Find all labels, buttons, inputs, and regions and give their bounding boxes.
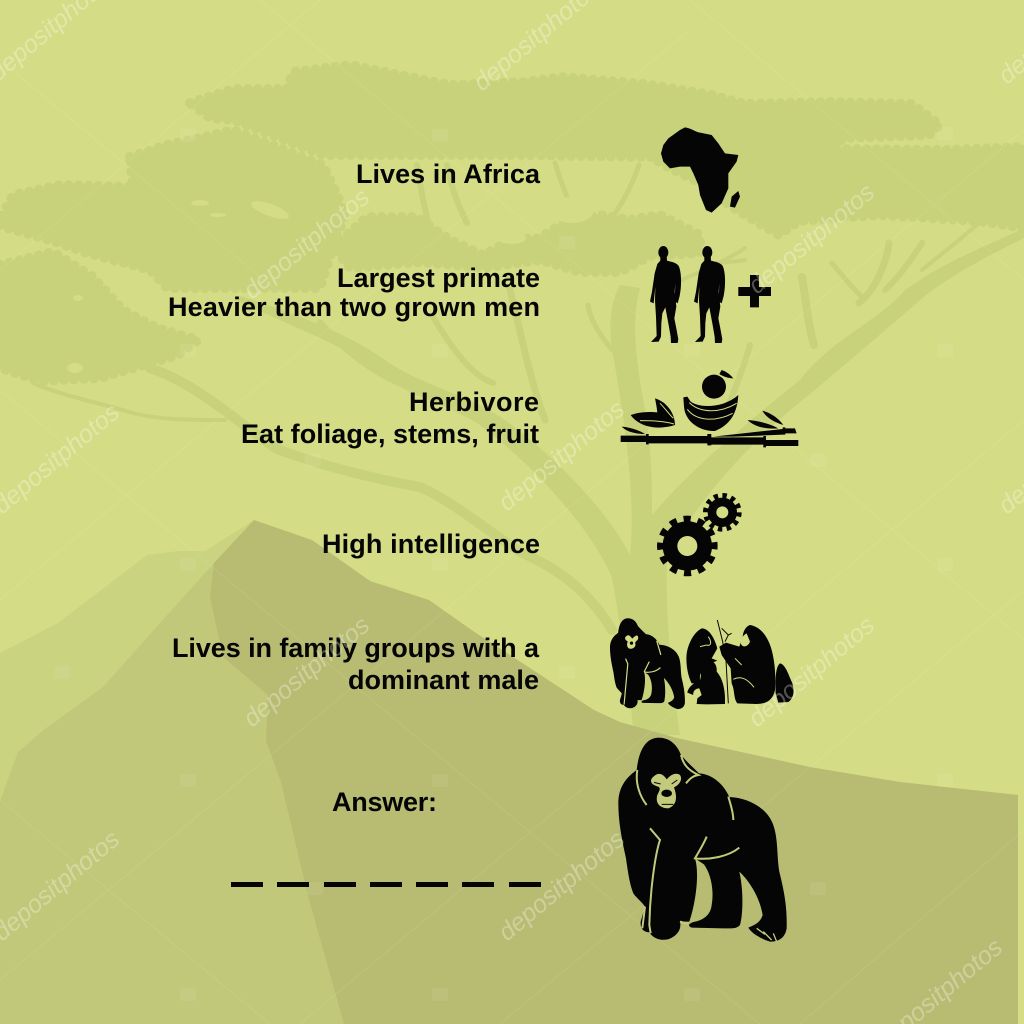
text: lives in Africa: Lives in Africa xyxy=(356,159,541,189)
text: high intelligence: High intelligence xyxy=(322,529,540,559)
icon: two men and plus xyxy=(650,246,771,343)
bamboo xyxy=(621,434,798,447)
text: herbivore: Eat foliage, stems, fruit xyxy=(241,419,539,449)
icon: Africa map xyxy=(661,127,740,213)
gorilla fur highlights xyxy=(637,755,739,933)
watermarks: depositphotos xyxy=(743,611,880,733)
icon: gears xyxy=(658,496,739,575)
watermarks: depositphotos xyxy=(493,395,630,517)
mountains xyxy=(0,520,1018,1024)
silverback xyxy=(610,618,685,709)
icon: food xyxy=(621,370,798,447)
tree silhouette xyxy=(0,65,1024,735)
text: largest primate xyxy=(168,263,540,322)
text: answer label: Answer: xyxy=(332,787,437,817)
canopy gaps xyxy=(67,197,594,373)
leaves xyxy=(631,398,675,428)
large female xyxy=(719,625,775,704)
text: family groups xyxy=(172,633,540,695)
bananas xyxy=(683,395,738,431)
text: largest primate: Heavier than two grown men xyxy=(168,292,540,322)
tree canopy xyxy=(0,65,1024,381)
text: family groups: Lives in family groups with a xyxy=(172,633,540,663)
infant xyxy=(687,660,725,704)
watermarks: depositphotos xyxy=(493,825,630,947)
icon: gorilla family xyxy=(610,618,794,709)
watermarks: depositphotos xyxy=(743,178,880,300)
branch xyxy=(717,620,732,703)
watermarks: depositphotos xyxy=(238,183,375,305)
middle hill xyxy=(0,520,344,1024)
front hill xyxy=(210,520,1018,1024)
juvenile xyxy=(776,663,794,703)
text: largest primate: Largest primate xyxy=(337,263,540,293)
watermarks: depositphotos xyxy=(238,611,375,733)
tree branches xyxy=(33,163,1024,735)
distant hill xyxy=(0,520,254,1024)
text: family groups: dominant male xyxy=(348,665,539,695)
icon: main gorilla xyxy=(618,738,787,942)
gorilla face xyxy=(651,774,681,808)
answer blanks xyxy=(231,882,541,887)
text: herbivore xyxy=(241,387,539,449)
orange xyxy=(702,375,726,399)
seated female xyxy=(686,628,717,683)
text: herbivore: Herbivore xyxy=(409,387,539,417)
